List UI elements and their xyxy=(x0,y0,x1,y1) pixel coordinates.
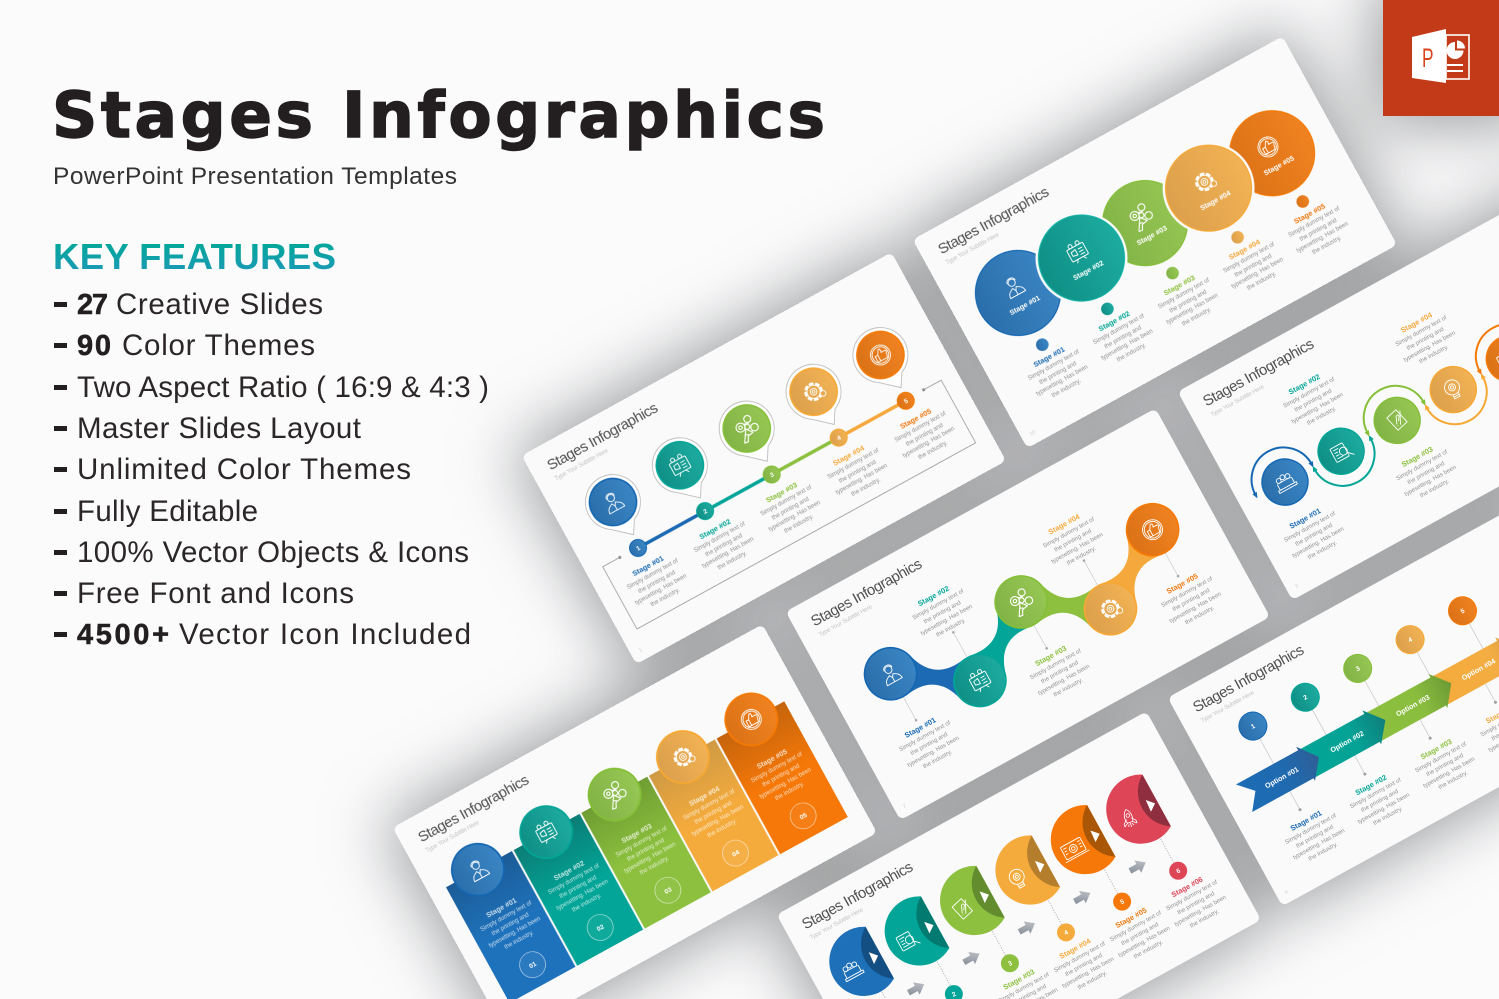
text stage 1: the industry. xyxy=(1308,842,1339,863)
text stage 2: Simply dummy text of xyxy=(912,588,965,621)
text stage 3: the industry. xyxy=(1438,770,1469,791)
bar 1: the printing and xyxy=(491,912,530,937)
text stage 4: the industry. xyxy=(1077,970,1108,991)
bar 1: 01 xyxy=(528,961,538,970)
text stage 6: the printing and xyxy=(1177,891,1216,916)
ribbon arrow 3 xyxy=(1363,667,1461,744)
text stage 2: the printing and xyxy=(1294,388,1333,414)
node 2: 2 xyxy=(1302,694,1309,702)
text stage 3: Stage #03 xyxy=(1033,644,1068,668)
node 4: 4 xyxy=(1063,929,1070,937)
text stage 5: the printing and xyxy=(1172,588,1211,613)
text stage 4: Simply dummy text of xyxy=(1042,517,1096,550)
pin 4 xyxy=(776,354,856,439)
cut circle 4 xyxy=(983,831,1063,917)
text stage 4: Simply dummy text of xyxy=(1223,242,1276,275)
text stage 6: Stage #06 xyxy=(1170,875,1204,899)
feature list: Unlimited Color Themes xyxy=(77,453,411,486)
bar 4: the industry. xyxy=(707,818,738,839)
connector green xyxy=(1020,561,1111,650)
arc 2 xyxy=(1310,434,1388,499)
text stage 2: the printing and xyxy=(1104,325,1143,350)
slide title: Stages Infographics xyxy=(808,555,925,630)
bar 2: typesetting. Has been xyxy=(556,879,610,912)
feature list: Fully Editable xyxy=(77,495,258,528)
text stage 1: the printing and xyxy=(1295,824,1335,850)
text stage 2: Stage #02 xyxy=(1287,372,1322,396)
node 2 xyxy=(694,500,717,523)
text stage 4: typesetting. Has been xyxy=(1051,532,1104,565)
arc 1 xyxy=(1238,435,1316,500)
slide subtitle: Type Your Subtitle Here xyxy=(945,232,1001,266)
text stage 3: typesetting. Has been xyxy=(1166,293,1219,326)
pin 2 xyxy=(642,428,722,512)
text stage 1: Simply dummy text of xyxy=(626,558,680,591)
bar 3: 03 xyxy=(663,886,674,896)
text stage 1: typesetting. Has been xyxy=(1292,526,1345,559)
ribbon labels: Option #01 xyxy=(1263,765,1300,790)
node 1 xyxy=(1234,707,1272,745)
slide subtitle: Type Your Subtitle Here xyxy=(1210,384,1266,418)
text stage 4: the printing and xyxy=(838,460,877,485)
text stage 2: Stage #02 xyxy=(1354,773,1388,797)
text stage 3: Simply dummy text of xyxy=(760,485,813,518)
bar 5: typesetting. Has been xyxy=(759,767,812,801)
text stage 1: Stage #01 xyxy=(903,715,937,740)
slide subtitle: Type Your Subtitle Here xyxy=(425,820,481,854)
text stage 5: Stage #05 xyxy=(1165,571,1199,596)
node 4 xyxy=(1054,920,1078,945)
cut circle 1 xyxy=(817,922,896,999)
page number: 10 xyxy=(1029,430,1037,438)
feature list: Master Slides Layout xyxy=(77,412,361,445)
text stage 3: typesetting. Has been xyxy=(1404,465,1457,498)
text stage 2: Stage #02 xyxy=(698,517,732,541)
text stage 4: the printing and xyxy=(1065,953,1104,978)
arc 3 xyxy=(1350,373,1428,438)
text stage 3: Simply dummy text of xyxy=(1029,648,1083,681)
page number: 1 xyxy=(638,647,643,654)
title: Stages Infographics xyxy=(52,79,825,152)
text stage 1: Simply dummy text of xyxy=(1284,813,1338,846)
text stage 2: the printing and xyxy=(704,533,744,558)
feature list: 4500+ xyxy=(77,619,169,651)
text stage 2: the industry. xyxy=(717,550,748,571)
subtitle: PowerPoint Presentation Templates xyxy=(53,163,457,190)
page number: 2 xyxy=(902,803,907,810)
circle stage 1 xyxy=(960,235,1076,351)
bar 2: 02 xyxy=(596,923,606,933)
feature list: Color Themes xyxy=(122,329,315,362)
bar 1 xyxy=(433,828,575,999)
text stage 5: the printing and xyxy=(905,423,944,448)
ribbon arrow 2 xyxy=(1296,703,1395,781)
text stage 1: the printing and xyxy=(1295,523,1334,548)
text stage 6: typesetting. Has been xyxy=(1174,895,1227,928)
slide subtitle: Type Your Subtitle Here xyxy=(809,907,865,941)
text stage 3: Stage #03 xyxy=(1400,445,1434,469)
text stage 4: Stage #04 xyxy=(831,443,867,468)
panel: slide cut circles xyxy=(777,711,1261,999)
circle 3 xyxy=(1366,389,1428,452)
text stage 4: Simply dummy text of xyxy=(1395,315,1448,348)
text stage 5: the industry. xyxy=(1311,235,1343,256)
circle labels: Stage #01 xyxy=(1008,293,1042,317)
arc 4 xyxy=(1423,372,1499,437)
timeline line xyxy=(638,401,906,548)
bar 4: typesetting. Has been xyxy=(691,804,745,838)
text stage 1: Stage #01 xyxy=(1289,808,1323,833)
circle stage 5 xyxy=(1214,96,1330,211)
text stage 2: the industry. xyxy=(1116,342,1147,363)
feature list: Vector Icon Included xyxy=(179,618,471,651)
text stage 1: Simply dummy text of xyxy=(1027,349,1081,382)
text stage 1: the printing and xyxy=(637,570,677,595)
circle 2 xyxy=(1310,420,1372,482)
circle 1 xyxy=(855,638,926,709)
text stage 1: Simply dummy text of xyxy=(899,720,952,753)
feature list: Free Font and Icons xyxy=(77,577,354,610)
text stage 2: the industry. xyxy=(1373,806,1404,827)
text stage 4: Stage #04 xyxy=(1058,936,1093,961)
node 1: 1 xyxy=(635,545,642,553)
icon: presentation page xyxy=(1446,35,1469,79)
text stage 4: Stage #04 xyxy=(1047,512,1082,536)
node 2: 2 xyxy=(702,508,709,516)
node 1: 1 xyxy=(1250,723,1257,731)
text stage 5: Simply dummy text of xyxy=(1161,576,1214,609)
circle 2 xyxy=(945,645,1015,716)
circle 3 xyxy=(986,567,1056,637)
bar 2: Stage #02 xyxy=(552,858,586,883)
circle labels: Stage #03 xyxy=(1135,223,1169,247)
cut circle 3 xyxy=(928,861,1007,947)
connector teal xyxy=(955,596,1047,686)
ribbon labels: Option #03 xyxy=(1394,693,1431,718)
panel: slide pins timeline xyxy=(522,252,1006,664)
heading: key features: KEY FEATURES xyxy=(53,236,336,277)
slide title: Stages Infographics xyxy=(1190,641,1307,716)
text stage 5: the printing and xyxy=(1299,218,1338,243)
node 3 xyxy=(998,951,1022,975)
text stage 2: typesetting. Has been xyxy=(920,604,974,637)
text stage 4: Simply dummy text of xyxy=(827,448,880,481)
text stage 1: the industry. xyxy=(922,749,954,770)
text stage 3: typesetting. Has been xyxy=(1037,664,1091,697)
text stage 3: typesetting. Has been xyxy=(768,500,822,533)
node 3: 3 xyxy=(1007,960,1014,968)
text stage 3: Stage #03 xyxy=(1002,967,1036,992)
bar 4: the printing and xyxy=(694,801,733,826)
pin 1 xyxy=(576,465,656,549)
text stage 6: the industry. xyxy=(1189,909,1221,930)
node 4 xyxy=(827,426,850,449)
text stage 4: the printing and xyxy=(1406,327,1445,352)
text stage 4: the industry. xyxy=(1419,344,1450,365)
connector amber xyxy=(1086,524,1177,614)
bar 3: typesetting. Has been xyxy=(623,842,677,875)
text stage 4: the industry. xyxy=(1066,546,1098,567)
node 6 xyxy=(1166,859,1190,883)
text stage 5: the industry. xyxy=(1184,605,1216,626)
icon: door with P: P xyxy=(1422,43,1434,73)
connector blue xyxy=(890,632,981,722)
bar 5: Simply dummy text of xyxy=(750,752,804,785)
feature list: 100% Vector Objects & Icons xyxy=(77,536,469,569)
circle 4 xyxy=(1422,358,1484,421)
node 5: 5 xyxy=(903,397,910,405)
bar 5: the printing and xyxy=(762,763,801,789)
bar 1: the industry. xyxy=(504,930,535,951)
text stage 4: typesetting. Has been xyxy=(1061,956,1115,990)
panel: slide bars xyxy=(393,624,877,999)
text stage 4: typesetting. Has been xyxy=(835,463,889,496)
node 3: 3 xyxy=(1355,665,1362,673)
text stage 2: the printing and xyxy=(923,600,962,625)
circle stage 2 xyxy=(1023,200,1140,316)
text stage 3: Simply dummy text of xyxy=(1414,741,1468,774)
feature list: 90 xyxy=(77,330,111,362)
circle 4 xyxy=(1075,573,1146,644)
slide title: Stages Infographics xyxy=(799,858,916,933)
bar 1: Stage #01 xyxy=(484,896,518,920)
panel: slide overlapping circles xyxy=(913,36,1397,448)
node 2 xyxy=(1286,678,1324,716)
slide subtitle: Type Your Subtitle Here xyxy=(818,604,874,638)
text stage 3: Stage #03 xyxy=(1419,737,1453,761)
text stage 1: Stage #01 xyxy=(1288,506,1322,531)
text stage 1: Stage #01 xyxy=(631,554,665,578)
text stage 3: the printing and xyxy=(1040,660,1080,685)
bar 5: the industry. xyxy=(774,781,806,802)
text stage 1: typesetting. Has been xyxy=(907,735,961,769)
node 5: 5 xyxy=(1119,898,1126,906)
ribbon arrow 1 xyxy=(1234,740,1328,815)
text stage 5: typesetting. Has been xyxy=(902,426,956,460)
circle labels: Stage #05 xyxy=(1262,153,1296,178)
text stage 3: the printing and xyxy=(1407,461,1446,486)
text stage 2: Simply dummy text of xyxy=(1349,777,1403,810)
circle stage 4 xyxy=(1150,130,1267,247)
text stage 1: Stage #01 xyxy=(1032,345,1066,369)
node 5: 5 xyxy=(1460,607,1466,615)
feature list xyxy=(54,288,489,651)
slide title: Stages Infographics xyxy=(1200,335,1317,410)
slide subtitle: Type Your Subtitle Here xyxy=(1200,690,1256,724)
bar 4: Stage #04 xyxy=(687,784,721,808)
ribbon labels: Option #04 xyxy=(1460,656,1497,682)
ribbon labels xyxy=(1263,656,1497,790)
bar 2: the industry. xyxy=(571,893,603,914)
connector lines xyxy=(886,523,1180,722)
text stage 4: typesetting. Has been xyxy=(1403,330,1457,364)
node 4: 4 xyxy=(1407,636,1414,644)
text stage 2: the industry. xyxy=(936,618,967,639)
text stage 4: Simply dummy text of xyxy=(1053,941,1107,974)
ribbon labels: Option #02 xyxy=(1329,729,1365,755)
text stage 3: typesetting. Has been xyxy=(1422,756,1476,790)
text stage 5: typesetting. Has been xyxy=(1118,926,1171,959)
text stage 5: the printing and xyxy=(1121,922,1160,947)
node 6: 6 xyxy=(1175,867,1182,875)
arrows xyxy=(850,856,1149,999)
text stage 3: Stage #03 xyxy=(1162,273,1197,298)
text stage 1: the printing and xyxy=(910,732,949,757)
circle stage 3 xyxy=(1087,165,1203,281)
bar 3: the industry. xyxy=(639,856,670,877)
bar 1: typesetting. Has been xyxy=(488,916,542,949)
circle 5 xyxy=(1117,494,1188,565)
bar 5 xyxy=(704,679,848,854)
circle 5 xyxy=(1478,328,1499,390)
panel: slide cycle arrows xyxy=(1178,188,1499,600)
text stage 1: typesetting. Has been xyxy=(1292,828,1346,861)
node 4: 4 xyxy=(836,434,843,442)
bar 3 xyxy=(569,754,711,929)
ribbon arrow 4 xyxy=(1429,630,1499,708)
connector lines xyxy=(1252,582,1499,812)
text stage 3: the industry. xyxy=(1181,307,1213,328)
slide title: Stages Infographics xyxy=(544,399,661,474)
text stage 5: Stage #05 xyxy=(1292,201,1327,226)
node 3 xyxy=(760,463,783,486)
text stage 2: the printing and xyxy=(1360,789,1399,814)
text stage 4: typesetting. Has been xyxy=(1231,257,1285,290)
text stage 5: typesetting. Has been xyxy=(1169,591,1223,625)
text stage 4: the printing and xyxy=(1234,253,1273,279)
node 1 xyxy=(626,536,650,560)
bar 5: 05 xyxy=(799,812,809,822)
text stage 3: the industry. xyxy=(1419,478,1451,499)
text stage 4: Stage #04 xyxy=(1227,237,1262,262)
feature list: Creative Slides xyxy=(116,288,323,321)
bar 2 xyxy=(501,791,643,966)
text stage 3: the printing and xyxy=(1169,289,1208,314)
panel: slide chain xyxy=(786,408,1270,820)
text stage 5: Simply dummy text of xyxy=(1288,206,1341,239)
text stage 5: Stage #05 xyxy=(1114,906,1148,930)
bar 3: Simply dummy text of xyxy=(615,826,668,859)
cut circle 5 xyxy=(1038,801,1118,887)
ring stage 2 xyxy=(1019,196,1144,321)
bar 3: the printing and xyxy=(626,838,666,863)
text stage 4: the printing and xyxy=(1054,528,1093,554)
node 3 xyxy=(1339,649,1377,687)
node 2 xyxy=(942,982,966,999)
text stage 2: the industry. xyxy=(1306,406,1338,427)
cut circle 6 xyxy=(1094,770,1173,856)
pin 5 xyxy=(843,318,923,402)
slide title: Stages Infographics xyxy=(935,183,1052,258)
text stage 2: Simply dummy text of xyxy=(1092,313,1146,347)
arc 5 xyxy=(1462,311,1499,376)
bracket outline xyxy=(602,379,976,629)
text stage 2: Simply dummy text of xyxy=(693,521,747,554)
node 5 xyxy=(894,389,917,412)
text stage 2: Stage #02 xyxy=(916,584,951,608)
node 5 xyxy=(1110,889,1134,914)
text stage 6: Simply dummy text of xyxy=(1165,879,1219,912)
feature list: Two Aspect Ratio ( 16:9 & 4:3 ) xyxy=(77,371,489,404)
text stage 1: the industry. xyxy=(1051,378,1082,399)
text stage 2: typesetting. Has been xyxy=(1291,392,1345,425)
text stage 2: typesetting. Has been xyxy=(1101,329,1154,362)
text stage 1: typesetting. Has been xyxy=(1035,364,1089,398)
bar 1: Simply dummy text of xyxy=(480,900,533,933)
text stage 3: the industry. xyxy=(1053,677,1084,698)
text stage 4: the industry. xyxy=(1246,271,1278,292)
node 3: 3 xyxy=(769,471,776,479)
text stage 5: Simply dummy text of xyxy=(1109,910,1163,943)
text stage 5: the industry. xyxy=(918,440,949,461)
text stage 3: the printing and xyxy=(1426,753,1465,778)
node 5 xyxy=(1443,592,1482,630)
feature list: 27 xyxy=(77,289,108,321)
text stage 1: the printing and xyxy=(1039,361,1078,386)
slide subtitle: Type Your Subtitle Here xyxy=(554,448,610,482)
cut circle 2 xyxy=(872,892,952,978)
slide shadows xyxy=(383,0,1499,999)
page number: 3 xyxy=(1294,583,1299,590)
circle labels: Stage #02 xyxy=(1071,258,1105,282)
text stage 4: Stage #04 xyxy=(1399,310,1434,335)
bar 2: Simply dummy text of xyxy=(547,863,601,896)
text stage 3: the industry. xyxy=(783,514,815,535)
text stage 1: the industry. xyxy=(650,587,681,608)
node 4 xyxy=(1391,621,1429,659)
text stage 5: typesetting. Has been xyxy=(1296,221,1350,255)
text stage 1: Simply dummy text of xyxy=(1283,511,1337,544)
circle 1 xyxy=(1254,451,1316,513)
dotted connectors xyxy=(881,837,1178,999)
page number: 6 xyxy=(1284,889,1289,896)
bar 2: the printing and xyxy=(559,875,598,900)
bar 5: Stage #05 xyxy=(755,747,789,771)
circle labels: Stage #04 xyxy=(1198,188,1232,212)
text stage 2: typesetting. Has been xyxy=(701,537,755,570)
bar 3: Stage #03 xyxy=(620,821,653,845)
panel: slide ribbon arrows xyxy=(1168,494,1499,906)
node 2: 2 xyxy=(951,991,958,999)
text stage 2: Simply dummy text of xyxy=(1283,377,1336,410)
text stage 5: Simply dummy text of xyxy=(894,411,947,444)
bar 4: Simply dummy text of xyxy=(683,789,736,822)
text stage 3: the printing and xyxy=(771,496,810,522)
text stage 1: typesetting. Has been xyxy=(634,573,688,607)
text stage 3: Simply dummy text of xyxy=(1396,449,1449,482)
text stage 1: the industry. xyxy=(1307,540,1339,561)
text stage 2: typesetting. Has been xyxy=(1357,792,1411,826)
ring stage 4 xyxy=(1146,126,1271,251)
markers xyxy=(1034,193,1311,353)
text stage 3: Simply dummy text of xyxy=(1158,278,1211,311)
slide title: Stages Infographics xyxy=(415,771,532,846)
text stage 3: Stage #03 xyxy=(764,480,799,505)
circle labels xyxy=(994,128,1296,317)
PowerPoint badge xyxy=(1383,0,1499,116)
pin 3 xyxy=(709,391,789,476)
text stage 2: Stage #02 xyxy=(1097,309,1131,333)
text stage 5: the industry. xyxy=(1133,939,1165,960)
text stage 5: Stage #05 xyxy=(898,406,933,431)
text stage 4: the industry. xyxy=(850,477,882,498)
bar 4: 04 xyxy=(731,849,741,859)
bar 4 xyxy=(636,717,778,891)
